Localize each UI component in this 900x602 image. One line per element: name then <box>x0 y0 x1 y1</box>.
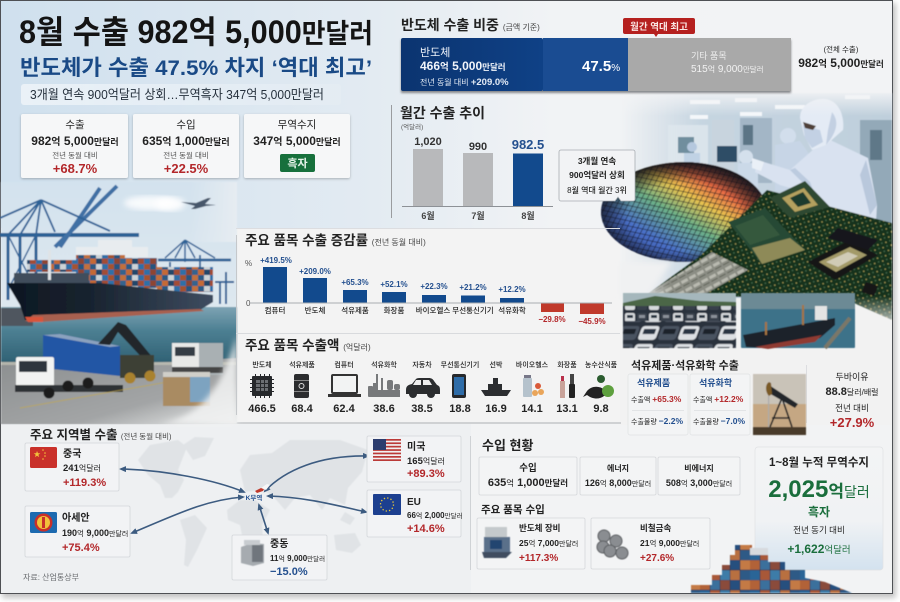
panel: main export items: 농수산식품 <box>585 360 618 369</box>
callout: 900 billion: 8월 역대 월간 3위 <box>567 185 627 195</box>
panel: main export items: 화장품 <box>557 360 577 369</box>
card: nonferrous metals: 21억 9,000만달러 <box>640 538 699 548</box>
card: trade balance: 347억 5,000만달러 <box>253 134 341 148</box>
chart: export growth by item <box>236 228 620 415</box>
icon: refinery <box>368 374 400 397</box>
callout: 900 billion: 3개월 연속 <box>578 156 616 166</box>
card: Middle East <box>232 535 327 580</box>
photo: semiconductor cleanroom <box>601 93 892 320</box>
chart: export growth by item: +65.3% <box>341 278 369 287</box>
card: China: +119.3% <box>63 477 106 489</box>
card: nonferrous metals: 비철금속 <box>640 523 671 533</box>
panel: main export items: 석유화학 <box>371 360 397 369</box>
panel: main export items: 바이오헬스 <box>516 360 549 369</box>
stacked share bar: 47.5% <box>582 58 620 75</box>
stacked share bar: 466억 5,000만달러 <box>420 59 506 73</box>
panel: cumulative trade balance: 1~8월 누적 무역수지 <box>769 455 869 469</box>
cleanroom edge fades <box>620 90 892 332</box>
card: USA: 미국 <box>407 440 425 453</box>
panel: main export items: 18.8 <box>449 403 471 415</box>
world map <box>138 437 368 567</box>
card: imports: 전년 동월 대비 <box>163 150 209 160</box>
card: petroleum products: 수출물량 −2.2% <box>631 416 683 426</box>
panel: cumulative trade balance: 전년 동기 대비 <box>793 525 845 535</box>
chart: monthly export trend: 1,020 <box>414 136 442 148</box>
chart: monthly export trend: 월간 수출 추이 <box>400 105 485 121</box>
panel: import status: 비에너지 <box>684 463 714 473</box>
chart: monthly export trend: 6월 <box>421 210 435 221</box>
card: petrochemicals: 수출물량 −7.0% <box>693 416 745 426</box>
card: imports: 635억 1,000만달러 <box>142 134 230 148</box>
chart: export growth by item: % <box>245 259 252 268</box>
card: petroleum products: 석유제품 <box>637 377 670 388</box>
card: USA <box>367 436 461 482</box>
chart: export growth by item: −45.9% <box>578 317 606 326</box>
panel: main export items: 자동차 <box>412 360 432 369</box>
Dubai crude: 전년 대비 <box>835 403 869 413</box>
card: EU: 66억 2,000만달러 <box>407 511 463 520</box>
panel: main export items: 68.4 <box>291 403 314 415</box>
card: imports: +22.5% <box>164 161 209 176</box>
chart: monthly export trend: 7월 <box>471 210 485 221</box>
panel: exports by region: 주요 지역별 수출 (전년 동월 대비) <box>30 428 172 442</box>
chart: export growth by item: +12.2% <box>498 285 526 294</box>
total exports label: 982억 5,000만달러 <box>798 56 884 70</box>
card: USA: +89.3% <box>407 468 445 480</box>
panel: main export items: 62.4 <box>333 403 356 415</box>
panel: import status: 주요 품목 수입 <box>481 503 545 516</box>
callout: 900 billion: 900억달러 상회 <box>569 170 625 180</box>
icon: vial and pills <box>523 375 544 397</box>
summary pill: 3개월 연속 900억달러 상회…무역흑자 347억 5,000만달러 <box>30 87 324 102</box>
chart: export growth by item: 컴퓨터 <box>265 305 285 315</box>
card: trade balance: 무역수지 <box>278 119 316 131</box>
card: USA: 165억달러 <box>407 456 445 467</box>
Korea label: K무역 <box>246 493 262 502</box>
panel: import status: 126억 8,000만달러 <box>585 478 651 488</box>
stacked share bar: 반도체 <box>420 46 450 59</box>
chart: export growth by item: 무선통신기기 <box>452 305 494 315</box>
chart: monthly export trend: 990 <box>469 141 487 153</box>
card: EU: EU <box>407 497 421 508</box>
panel: main export items: 9.8 <box>593 403 609 415</box>
card: petroleum products <box>628 374 688 435</box>
total exports label: (전체 수출) <box>824 44 859 54</box>
card: China: 중국 <box>63 448 81 460</box>
card: ASEAN <box>25 506 130 557</box>
panel: import status: 635억 1,000만달러 <box>488 477 568 489</box>
panel: main export items: 석유제품 <box>289 360 315 369</box>
panel: main export items: 38.5 <box>411 403 433 415</box>
chart: export growth by item: 바이오헬스 <box>416 305 450 315</box>
Dubai crude: 두바이유 <box>835 372 869 382</box>
panel: main export items: 13.1 <box>556 403 578 415</box>
total exports label <box>798 44 884 70</box>
chart: export growth by item: 0 <box>246 299 251 308</box>
card: imports: 수입 <box>176 118 196 131</box>
card: semiconductor equipment: 반도체 장비 <box>519 523 560 533</box>
callout: 900 billion <box>559 150 635 201</box>
stacked share bar: 전년 동월 대비 +209.0% <box>420 77 509 88</box>
title: 8월 수출 982억 5,000만달러 <box>19 14 373 50</box>
panel: petroleum exports <box>628 358 879 435</box>
card: nonferrous metals <box>591 518 710 569</box>
chart: export growth by item: 석유화학 <box>498 305 526 315</box>
panel: main export items: 선박 <box>490 360 503 369</box>
card: ASEAN: 아세안 <box>62 511 90 524</box>
card: imports <box>133 114 239 178</box>
stacked share bar <box>401 38 791 93</box>
panel: cumulative trade balance <box>755 447 883 570</box>
chart: export growth by item: 석유제품 <box>341 305 369 315</box>
card: petroleum products: 수출액 +65.3% <box>631 394 682 404</box>
panel: exports by region <box>25 428 463 580</box>
badge: monthly record: 월간 역대 최고 <box>630 21 688 33</box>
subtitle: 반도체가 수출 47.5% 차지 ‘역대 최고’ <box>20 56 372 80</box>
photo: cargo port <box>0 182 237 424</box>
Dubai crude: +27.9% <box>830 415 875 430</box>
card: Middle East: 11억 9,000만달러 <box>270 554 325 563</box>
card: Middle East: 중동 <box>270 538 288 550</box>
chart: monthly export trend: 8월 <box>521 210 535 221</box>
card: semiconductor equipment: +117.3% <box>519 553 558 564</box>
card: nonferrous metals: +27.6% <box>640 553 674 564</box>
card: Middle East: −15.0% <box>270 566 308 578</box>
icon: car <box>406 378 440 398</box>
icon: barrel <box>294 374 309 398</box>
icon: fish and fruit <box>583 375 614 399</box>
chart: export growth by item: 반도체 <box>305 305 325 315</box>
card: ASEAN: +75.4% <box>62 542 100 554</box>
chart: export growth by item: −29.8% <box>538 315 566 324</box>
panel: main export items: 컴퓨터 <box>334 360 354 369</box>
card: China: 241억달러 <box>63 463 101 474</box>
badge: monthly record <box>623 18 695 37</box>
chart: export growth by item: 화장품 <box>384 305 404 315</box>
Dubai crude <box>825 372 879 430</box>
card: trade balance: 흑자 <box>287 156 308 170</box>
panel: import status: 수입 현황 <box>482 438 533 453</box>
panel: cumulative trade balance: 흑자 <box>808 504 830 519</box>
icon: cosmetics <box>560 374 575 398</box>
card: semiconductor equipment <box>477 518 585 569</box>
photo: car terminal <box>623 293 736 348</box>
panel: import status: 수입 <box>519 462 537 474</box>
card: semiconductor equipment: 25억 7,000만달러 <box>519 538 578 548</box>
route arrows <box>121 456 368 533</box>
card: exports <box>21 114 128 178</box>
card: exports: +68.7% <box>53 161 98 176</box>
card: petrochemicals: 석유화학 <box>699 377 733 388</box>
panel: cumulative trade balance: 2,025억달러 <box>768 476 870 503</box>
Korea label <box>246 484 270 502</box>
chart: export growth by item: +21.2% <box>459 283 487 292</box>
summary pill <box>21 84 341 105</box>
chart: export growth by item: +209.0% <box>299 267 331 276</box>
icon: ship <box>481 378 511 396</box>
stacked share bar: 기타 품목 <box>691 51 727 61</box>
photo: oil pumpjack <box>753 374 806 435</box>
card: ASEAN: 190억 9,000만달러 <box>62 528 128 538</box>
panel: main export items: 466.5 <box>248 403 276 415</box>
icon: chip <box>250 374 274 398</box>
heading: semiconductor share: 반도체 수출 비중 (금액 기준) <box>401 17 540 33</box>
panel: main export items: 반도체 <box>252 360 272 369</box>
Dubai crude: 88.8달러/배럴 <box>825 386 879 398</box>
chart: monthly export trend: (억달러) <box>401 122 423 131</box>
icon: phone <box>452 374 466 398</box>
icon: laptop <box>328 375 361 397</box>
photo: tanker ship <box>741 293 855 349</box>
card: petrochemicals <box>690 374 750 435</box>
chart: monthly export trend: 982.5 <box>512 137 544 152</box>
chart: export growth by item: +52.1% <box>380 280 408 289</box>
panel: import status <box>470 436 740 570</box>
chart: export growth by item: 주요 품목 수출 증감률 (전년 동월 대비) <box>245 233 426 248</box>
card: trade balance <box>244 114 350 178</box>
panel: petroleum exports: 석유제품·석유화학 수출 <box>631 358 739 372</box>
chart: monthly export trend <box>391 105 553 221</box>
panel: main export items: 38.6 <box>373 403 395 415</box>
card: China <box>25 443 119 491</box>
panel: main export items: 14.1 <box>521 403 543 415</box>
stacked share bar: 515억 9,000만달러 <box>691 64 764 75</box>
card: exports: 수출 <box>65 119 85 131</box>
panel: cumulative trade balance: +1,622억달러 <box>787 542 851 556</box>
panel: import status: 508억 3,000만달러 <box>666 478 732 488</box>
card: EU: +14.6% <box>407 523 445 535</box>
panel: main export items <box>236 333 620 415</box>
panel: main export items: 주요 품목 수출액 (억달러) <box>245 338 371 353</box>
card: EU <box>367 490 463 537</box>
panel: main export items: 무선통신기기 <box>441 360 479 369</box>
panel: main export items: 16.9 <box>485 403 507 415</box>
card: petrochemicals: 수출액 +12.2% <box>693 394 744 404</box>
chart: export growth by item: +419.5% <box>260 256 292 265</box>
chart: export growth by item: +22.3% <box>420 282 448 291</box>
photo: stacked containers <box>691 545 852 593</box>
card: exports: 982억 5,000만달러 <box>31 134 119 148</box>
card: exports: 전년 동월 대비 <box>52 150 98 160</box>
panel: import status: 에너지 <box>607 463 629 473</box>
source note: 자료: 산업통상부 <box>23 572 79 582</box>
